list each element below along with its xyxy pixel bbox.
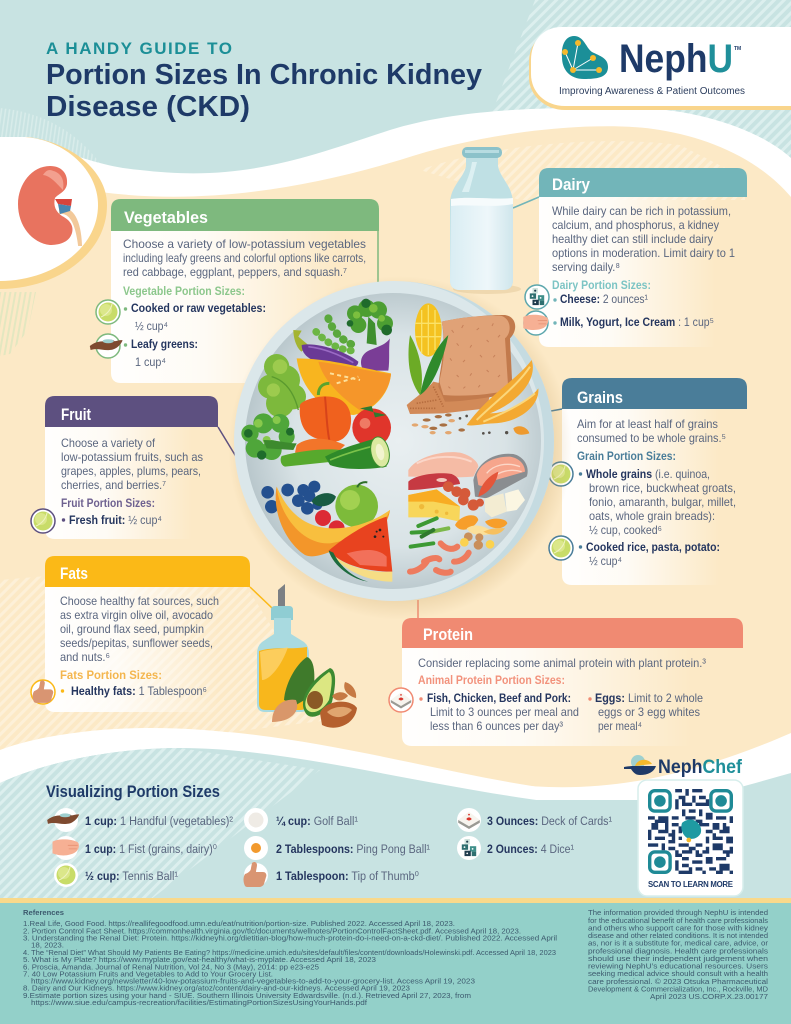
text: grain portion sizes: brown rice, buckwheat groats, bbox=[589, 481, 736, 495]
disclaimer: should use their independent judgement when bbox=[588, 954, 768, 963]
references: 18, 2023. bbox=[31, 940, 64, 950]
text: grain portion sizes: Cooked rice, pasta, potato: bbox=[586, 540, 720, 554]
text: animal protein portion sizes: Fish, Chicken, Beef and Pork: bbox=[427, 691, 571, 705]
heading: Visualizing Portion Sizes: Visualizing Portion Sizes bbox=[46, 783, 220, 801]
item: deck of cards: 3 Ounces: Deck of Cards¹ bbox=[487, 814, 612, 828]
icon: oil bottle, avocado and almonds bbox=[257, 584, 357, 728]
header: Vegetables: Vegetables bbox=[124, 209, 208, 227]
panel: fats bbox=[31, 556, 250, 712]
text: fruit portion sizes: Fresh fruit: ½ cup⁴ bbox=[69, 513, 162, 527]
QR code card: SCAN TO LEARN MORE bbox=[648, 880, 733, 889]
text: fats portion sizes: Fats Portion Sizes: bbox=[60, 668, 162, 682]
grains on plate bbox=[407, 303, 538, 435]
logo: NephU bbox=[529, 27, 791, 110]
text: grain portion sizes: ½ cup⁴ bbox=[589, 554, 622, 568]
references: 4. The “Renal Diet” What Should My Patients Be Eating? https://medicine.umich.edu/sites/default/files/content/downloads/Holewinski.pdf. Accessed April 18, 2023 bbox=[23, 948, 556, 957]
panel: dairy bbox=[523, 168, 747, 347]
text: animal protein portion sizes bbox=[418, 673, 703, 733]
logo: NephChef: NephChef bbox=[658, 757, 743, 778]
references: References bbox=[23, 908, 64, 917]
text: dairy description: While dairy can be rich in potassium, bbox=[552, 204, 731, 218]
text: grain portion sizes: oats, whole grain breads): bbox=[589, 509, 715, 523]
text: fats description: and nuts.⁶ bbox=[60, 650, 110, 664]
references: 3. Understanding the Renal Diet: Protein. https://kidneyhi.org/dietitian-blog/how-much-protein-do-i-need-on-a-ckd-diet/. Published 2022. Accessed April bbox=[23, 934, 557, 942]
disclaimer: April 2023 US.CORP.X.23.00177 bbox=[650, 992, 768, 1001]
text: grain portion sizes: ½ cup, cooked⁶ bbox=[589, 523, 662, 537]
disclaimer: reviewing NephU’s educational resources. Users bbox=[588, 962, 768, 970]
header: Fruit: Fruit bbox=[61, 406, 91, 424]
header: Grains: Grains bbox=[577, 389, 623, 407]
references: 7. 40 Low Potassium Fruits and Vegetables to Add to Your Grocery List. bbox=[23, 970, 273, 978]
header: Protein: Protein bbox=[423, 626, 473, 644]
item: golf ball: ¼ cup: Golf Ball¹ bbox=[276, 814, 358, 828]
text: fats description bbox=[60, 594, 219, 664]
fruit on plate bbox=[261, 481, 392, 582]
item: thumb bbox=[244, 862, 419, 887]
text: dairy portion sizes: Milk, Yogurt, Ice Cream : 1 cup⁵ bbox=[560, 315, 714, 329]
text: vegetables description: Choose a variety of low-potassium vegetables bbox=[123, 237, 366, 251]
references bbox=[23, 908, 557, 1007]
icon: deck of cards bbox=[389, 688, 413, 712]
text: dairy description: healthy diet can still include dairy bbox=[552, 232, 713, 246]
text: grain portion sizes: Grain Portion Sizes: bbox=[577, 449, 676, 463]
icon: fist bbox=[523, 311, 548, 335]
disclaimer: as, nor is it a substitute for, medical care, advice, or bbox=[588, 939, 768, 948]
text: vegetable portion sizes: 1 cup⁴ bbox=[135, 355, 166, 369]
text: fats description: as extra virgin olive oil, avocado bbox=[60, 608, 213, 622]
panel: fruit bbox=[31, 396, 218, 539]
plate of food bbox=[228, 276, 572, 620]
QR code bbox=[648, 789, 733, 874]
text: animal protein portion sizes: eggs or 3 egg whites bbox=[598, 705, 700, 719]
text: animal protein portion sizes: less than 6 ounces per day³ bbox=[430, 719, 563, 733]
text: fruit description: cherries, and berries.⁷ bbox=[61, 478, 166, 492]
icon: hand bbox=[90, 334, 123, 358]
panel: vegetables bbox=[90, 199, 379, 383]
text: fruit description: low-potassium fruits, such as bbox=[61, 450, 203, 464]
footer band bbox=[0, 898, 791, 1024]
item: dice: 2 Ounces: 4 Dice¹ bbox=[487, 842, 574, 856]
text: grains description bbox=[577, 417, 726, 445]
disclaimer bbox=[588, 908, 769, 1001]
text: dairy description: serving daily.⁸ bbox=[552, 260, 620, 274]
disclaimer: professional diagnosis. Health care professionals bbox=[588, 946, 768, 956]
item: handful bbox=[47, 808, 233, 832]
icon: dice bbox=[525, 285, 549, 309]
references: 1.Real Life, Good Food. https://reallifegoodfood.umn.edu/eat/nutrition/portion-size. Published 2022. Accessed April 18, 2023. bbox=[23, 919, 455, 928]
header: Fats: Fats bbox=[60, 565, 88, 583]
text: vegetable portion sizes: Cooked or raw vegetables: bbox=[131, 301, 266, 315]
title bbox=[46, 39, 482, 123]
text: fats portion sizes bbox=[60, 668, 207, 698]
text: vegetables description: including leafy greens and colorful options like carrots, bbox=[123, 251, 366, 265]
text: fruit portion sizes bbox=[61, 496, 162, 527]
QR code card bbox=[638, 780, 743, 896]
panel: grains bbox=[549, 378, 747, 585]
text: dairy portion sizes bbox=[552, 278, 714, 329]
text: animal protein portion sizes: Limit to 3 ounces per meal and bbox=[430, 705, 579, 719]
icon: milk bottle bbox=[450, 147, 521, 294]
item: tennis ball: ½ cup: Tennis Ball¹ bbox=[85, 869, 178, 883]
text: vegetable portion sizes bbox=[123, 284, 266, 369]
item: handful: 1 cup: 1 Handful (vegetables)² bbox=[85, 814, 233, 828]
text: vegetable portion sizes: Leafy greens: bbox=[131, 337, 198, 351]
text: vegetables description bbox=[123, 237, 366, 279]
text: dairy portion sizes: Dairy Portion Sizes: bbox=[552, 278, 651, 292]
protein on plate bbox=[408, 452, 528, 573]
logo: NephU: TM bbox=[734, 46, 741, 52]
header: Fruit bbox=[45, 396, 218, 427]
references: 8. Dairy and Our Kidneys. https://www.kidney.org/atoz/content/dairy-and-our-kidneys. Accessed April 19, 2023 bbox=[23, 984, 410, 992]
legend: visualizing portion sizes bbox=[47, 808, 612, 887]
references: https://www.siue.edu/campus-recreation/facilities/EstimatingPortionSizesUsingYourHands.pdf bbox=[31, 998, 368, 1007]
text: vegetable portion sizes: ½ cup⁴ bbox=[135, 319, 168, 333]
title: Portion Sizes In Chronic Kidney bbox=[46, 59, 482, 91]
item: fist: 1 cup: 1 Fist (grains, dairy)⁰ bbox=[85, 842, 217, 856]
text: vegetable portion sizes: Vegetable Portion Sizes: bbox=[123, 284, 245, 298]
text: grains description: consumed to be whole grains.⁵ bbox=[577, 431, 726, 445]
references: 6. Proscia, Amanda. Journal of Renal Nutrition, Vol 24, No 3 (May), 2014: pp e23-e25 bbox=[23, 962, 319, 972]
connector lines bbox=[218, 197, 562, 618]
text: fruit portion sizes: Fruit Portion Sizes: bbox=[61, 496, 155, 510]
text: grains description: Aim for at least half of grains bbox=[577, 417, 718, 431]
text: grain portion sizes: Whole grains (i.e. quinoa, bbox=[586, 467, 710, 481]
text: fruit description: Choose a variety of bbox=[61, 436, 156, 450]
text: protein description: Consider replacing some animal protein with plant protein.³ bbox=[418, 656, 706, 670]
header: Fats bbox=[45, 556, 250, 587]
icon: tennis ball bbox=[31, 509, 55, 533]
header: Dairy: Dairy bbox=[552, 176, 591, 194]
references: 2. Portion Control Fact Sheet. https://commonhealth.virginia.gov/tlc/documents/wellnotes/PortionControlFactSheet.pdf. Accessed April 18, 2023. bbox=[23, 926, 521, 936]
item: ping pong ball bbox=[244, 836, 430, 860]
text: animal protein portion sizes: per meal⁴ bbox=[598, 719, 642, 733]
logo: NephU: NephU bbox=[619, 37, 733, 81]
item: golf ball bbox=[244, 808, 358, 832]
vegetables on plate bbox=[241, 299, 393, 469]
text: dairy description bbox=[552, 204, 735, 274]
text: grain portion sizes bbox=[577, 449, 736, 568]
text: dairy portion sizes: Cheese: 2 ounces¹ bbox=[560, 292, 648, 306]
item: dice bbox=[457, 836, 574, 860]
panel: protein bbox=[389, 618, 743, 746]
disclaimer: Development & Commercialization, Inc., Rockville, MD bbox=[588, 984, 769, 994]
text: grain portion sizes: fonio, amaranth, bulgar, millet, bbox=[589, 495, 736, 509]
text: fruit description bbox=[61, 436, 203, 492]
item: ping pong ball: 2 Tablespoons: Ping Pong Ball¹ bbox=[276, 842, 430, 856]
text: fats description: oil, ground flax seed, pumpkin bbox=[60, 622, 204, 636]
disclaimer: seeking medical advice should consult with a health bbox=[588, 969, 768, 978]
text: dairy description: calcium, and phosphorus, a kidney bbox=[552, 218, 719, 232]
references: 9.Estimate portion sizes using your hand - SIUE. Southern Illinois University Edwardsville. (n.d.). Retrieved April 27, 2023, from bbox=[23, 991, 471, 1000]
text: dairy description: options in moderation. Limit dairy to 1 bbox=[552, 246, 735, 260]
text: vegetables description: red cabbage, eggplant, peppers, and squash.⁷ bbox=[123, 265, 347, 279]
icon: tennis ball bbox=[96, 300, 120, 324]
text: fats description: Choose healthy fat sources, such bbox=[60, 594, 219, 608]
disclaimer: and others who support care for those with kidney bbox=[588, 924, 768, 932]
header: Protein bbox=[402, 618, 743, 648]
logo: NephChef bbox=[624, 755, 743, 778]
title: A HANDY GUIDE TO bbox=[46, 39, 232, 58]
header: Dairy bbox=[539, 168, 747, 197]
text: fats portion sizes: Healthy fats: 1 Tablespoon⁶ bbox=[71, 684, 207, 698]
disclaimer: for the educational benefit of health care professionals bbox=[588, 916, 768, 925]
references: 5. What is My Plate? https://www.myplate.gov/eat-healthy/what-is-myplate. Accessed April 18, 2023 bbox=[23, 955, 376, 964]
item: deck of cards bbox=[457, 808, 612, 832]
title: Disease (CKD) bbox=[46, 91, 250, 123]
icon: thumb bbox=[31, 680, 55, 704]
disclaimer: disease and other related conditions. It is not intended bbox=[588, 931, 768, 940]
icon: kidney in white circle bbox=[0, 137, 107, 289]
item: fist bbox=[52, 836, 217, 860]
icon: tennis ball bbox=[549, 462, 573, 486]
item: tennis ball bbox=[54, 863, 178, 887]
disclaimer: The information provided through NephU is intended bbox=[588, 908, 768, 917]
text: animal protein portion sizes: Eggs: Limit to 2 whole bbox=[595, 691, 703, 705]
header: Grains bbox=[562, 378, 747, 409]
text: fruit description: grapes, apples, plums, pears, bbox=[61, 464, 201, 478]
text: fats description: seeds/pepitas, sunflower seeds, bbox=[60, 636, 213, 650]
header: Vegetables bbox=[111, 199, 379, 231]
icon: tennis ball bbox=[549, 536, 573, 560]
references: https://www.kidney.org/newsletter/40-low-potassium-fruits-and-vegetables-to-add-to-your-grocery-list. Access April 19, 2023 bbox=[31, 976, 475, 986]
item: thumb: 1 Tablespoon: Tip of Thumb⁰ bbox=[276, 869, 419, 883]
disclaimer: care professional. © 2023 Otsuka Pharmaceutical bbox=[588, 977, 768, 986]
logo: NephU: Improving Awareness & Patient Outcomes bbox=[559, 86, 745, 97]
text: animal protein portion sizes: Animal Protein Portion Sizes: bbox=[418, 673, 565, 687]
